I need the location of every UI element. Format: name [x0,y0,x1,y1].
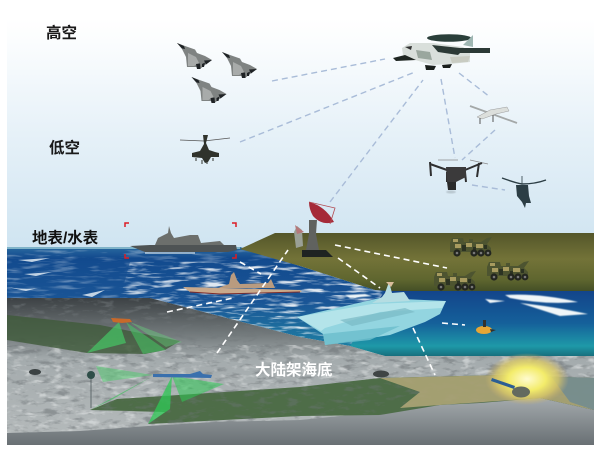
icon: radar dish [302,202,335,257]
icon: aircraft carrier [297,282,446,345]
land plateau [240,233,594,291]
red target brackets [125,223,236,258]
icon: AWACS aircraft [393,34,490,70]
label: low altitude: 低空 [49,138,80,157]
icon: truck 2 [487,261,529,281]
icon: MQ-9 drone [470,106,517,124]
sea surface [7,247,594,357]
icon: fighter jet 3 [192,77,226,103]
label: high altitude: 高空 [46,23,77,42]
sky background [7,18,594,250]
icon: detonating mine [512,386,530,398]
icon: fighter jet 2 [222,52,257,78]
icon: small radar on land [294,225,304,248]
left dark green sonar footprint [7,315,180,354]
label: ground and water surface: 地表/水表 [32,229,99,247]
explosion glow [485,353,569,405]
data links: surface and seabed network [167,245,465,375]
icon: upper underwater vehicle [111,318,132,323]
icon: truck 3 [434,271,476,291]
sonar beams: lower vehicle [90,366,224,424]
icon: lower underwater vehicle [153,371,212,378]
icon: torpedo [491,378,515,389]
label: continental shelf seabed: 大陆架海底 [255,360,333,379]
continental shelf green area [7,375,594,445]
icon: seabed buoy [87,371,95,408]
icon: mine near sediment [373,370,389,378]
icon: frigate [183,272,302,294]
icon: quadcopter drone [430,160,488,194]
icon: fighter jet 1 [177,43,212,69]
sonar beams: upper vehicle [87,322,182,354]
icon: seabed mine [29,369,41,375]
icon: truck 1 [450,237,492,257]
icon: yellow submersible [476,320,496,334]
icon: destroyer [130,226,237,253]
icon: helicopter [180,135,230,164]
icon: octocopter drone [502,176,546,208]
seabed terrain [7,298,594,445]
data links: air network [240,59,505,202]
